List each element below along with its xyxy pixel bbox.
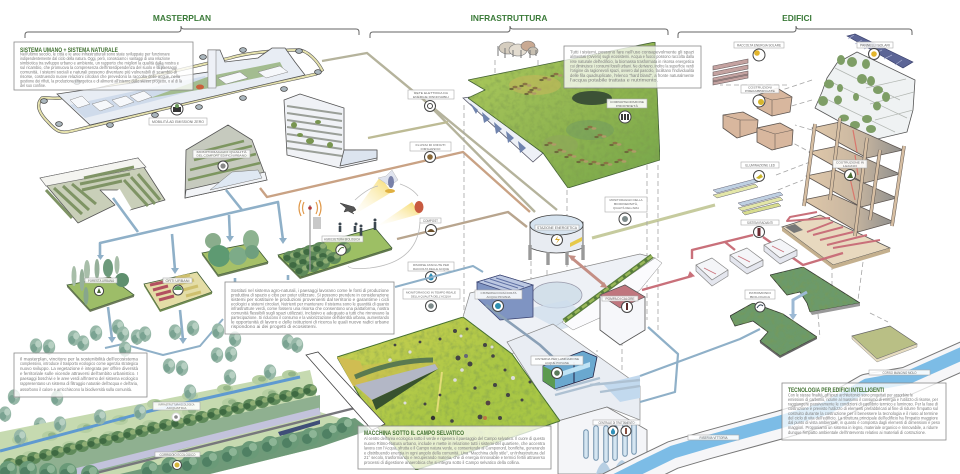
label: ecological infrastructure: INFRASTRUTTURA ECOLOGICA bbox=[158, 403, 194, 407]
label: LED lighting bbox=[741, 162, 779, 168]
label: rainwater resources: RACCOLTA DELLE ACQUE bbox=[413, 267, 449, 271]
icon: zero-emission mobility bbox=[171, 103, 183, 115]
icon: biodiversity monitoring bbox=[619, 213, 631, 225]
text block: human and natural systems: SISTEMA UMANO + SISTEMA NATURALE bbox=[20, 48, 118, 54]
label: timber construction bbox=[833, 160, 867, 168]
label: rainwater cistern: ACQUA PIOVANA bbox=[486, 295, 510, 299]
label: biological roofs: BIOLOGICA bbox=[750, 295, 770, 299]
label: treatment plant: CENTRALE DI TRATTAMENTO bbox=[598, 421, 635, 425]
illustration: wild field meadow bbox=[337, 317, 560, 470]
text block: technology for smart buildings: Con le stesse finalità, gli spazi architettonici sono progettati per assorbire le bbox=[788, 392, 914, 398]
label: solar panels: PANNELLI SOLARI bbox=[860, 43, 890, 47]
text block: masterplan sustainability: Il masterplan, vincitore per la sostenibilità dell'ecosistema bbox=[20, 356, 139, 362]
text block: machine under the wild field: lavora con l'Acqua, sfrutta e il Campo natura verde, e consentendo al Camponord, bonifiche, generando bbox=[364, 446, 546, 450]
label: water quality: DELLA QUALITÀ DELL'ACQUA bbox=[411, 294, 451, 298]
label: biodiversity monitoring bbox=[605, 197, 647, 212]
text block: technology for smart buildings: maggiori. Proponiamo un sistema in legno, materiale organico e rinnovabile, a ridurre bbox=[788, 425, 939, 430]
text block: masterplan sustainability bbox=[14, 353, 147, 397]
illustration: LED strips bbox=[713, 179, 783, 215]
building: terraced center block bbox=[185, 125, 267, 198]
text block: machine under the wild field: nuovo Ritmo-Natura urbano, include e mette in relazione tutti i sistemi del quartiere, che accentra bbox=[364, 441, 546, 446]
text block: grazing and biodiversity: delle fila quadruplicate, l'elenco "hard bland", a fronte naturalmente bbox=[570, 73, 695, 78]
label: solar energy harvesting bbox=[734, 42, 784, 48]
label: radiant systems bbox=[741, 220, 779, 225]
icon: radiant systems bbox=[754, 226, 764, 238]
text block: urban agriculture system: infrastrutture verdi, come fossero una risorsa che consentono una piattaforma, nostra bbox=[231, 306, 390, 311]
label: compost bbox=[420, 218, 441, 223]
label: biological roofs: PATRIMONIO bbox=[749, 291, 772, 295]
icon: comfort monitoring bbox=[218, 161, 228, 171]
heading: masterplan bbox=[25, 13, 359, 38]
icon: ecological infrastructure bbox=[172, 413, 180, 421]
label: community participation: COMPARTECIPAZIONE bbox=[610, 100, 644, 104]
text block: masterplan sustainability: e ferritoriale sulle vicende attraversi dell'ambito urbanistico. I bbox=[20, 371, 138, 376]
text block: human and natural systems: risorse, costruendo nuove relazioni circolari che prevedono la raccolta delle acque, nella bbox=[20, 74, 181, 79]
illustration: lamination tank bbox=[543, 351, 640, 395]
label: grid: RETE ELETTRICA DA bbox=[414, 91, 448, 95]
label: urban forest bbox=[85, 278, 117, 283]
label: timber construction: COSTRUZIONE IN bbox=[836, 161, 864, 165]
icon: community bbox=[619, 111, 631, 123]
heading: edifici bbox=[678, 13, 912, 38]
text block: grazing and biodiversity: cui diminuisce i consumi fossili urbani. Ne derivano, inoltre la superficie verdi bbox=[570, 64, 694, 68]
text block: technology for smart buildings: dunque l'impatto ambientale dell'intervento relativo ai materiali di costruzione. bbox=[788, 430, 926, 435]
text block: technology for smart buildings: dal punto di vista ambientale, in quanto è composta dagli elementi di dimensioni e peso bbox=[788, 420, 941, 425]
label: solar energy harvesting: RACCOLTA ENERGIA SOLARE bbox=[737, 43, 782, 47]
text block: urban agriculture system bbox=[225, 282, 394, 334]
text block: human and natural systems: sul ricambio, che promuova la compresenza dell'interdipendenza del suolo e di paesaggi bbox=[20, 65, 177, 70]
label: rainwater cistern: CISTERNA DI RACCOLTA bbox=[480, 291, 516, 295]
illustration: heat pump box bbox=[600, 285, 645, 345]
text block: human and natural systems: indipendentemente dal ciclo della natura. Oggi, però, conosciamo i vantaggi di una relazione bbox=[20, 56, 171, 61]
arrow: organic waste flow bbox=[260, 152, 530, 212]
panel: urban masterplan with zero-emission loop bbox=[39, 48, 322, 132]
label: energy station: STAZIONE ENERGETICA bbox=[537, 226, 578, 230]
heading: infrastruttura bbox=[370, 13, 668, 38]
zero-emission track bbox=[39, 50, 322, 132]
chart: radiant system base and piping bbox=[642, 212, 890, 290]
icon: biological roofs bbox=[755, 302, 765, 312]
text block: grazing and biodiversity bbox=[564, 46, 701, 88]
text block: machine under the wild field: MACCHINA SOTTO IL CAMPO SELVATICO bbox=[364, 431, 464, 437]
text block: technology for smart buildings: emissioni di carbonio, ridurre al massimo il consumo di energia e l'utilizzo di risorse, per bbox=[788, 397, 939, 402]
icon: solar panels bbox=[868, 48, 880, 60]
label: heat pump: POMPA DI CALORE bbox=[606, 297, 635, 301]
label: zero-emission mobility bbox=[149, 118, 207, 125]
label: treatment plant bbox=[593, 420, 640, 425]
label: ecological corridor: CORRIDOIO ECOLOGICO bbox=[160, 453, 196, 457]
arrow: heat flow double headed bbox=[568, 255, 608, 288]
icon: prefab construction bbox=[753, 95, 765, 107]
label: river name west: RISERVA VITTORIA bbox=[700, 436, 728, 440]
text block: masterplan sustainability: nuovo sviluppo. La vegetazione è integrata per offrire diversità bbox=[20, 366, 139, 371]
label: urban gardens: ORTI URBANI bbox=[166, 279, 190, 283]
building: tall green tower bbox=[284, 94, 377, 168]
text block: technology for smart buildings: del ciclo di vita dell'edificio. La struttura principale dell'edificio ha l'impatto maggiore bbox=[788, 416, 939, 420]
label: lamination tank: CISTERNA PER LAMINAZIONE bbox=[535, 357, 579, 361]
icon: energy station bbox=[552, 234, 562, 246]
arrow: biodiversity monitoring to buildings bbox=[592, 205, 715, 238]
illustration: substrate square bbox=[852, 326, 917, 362]
text block: grazing and biodiversity: l'acqua potabile trattata e nutrimento. bbox=[570, 78, 658, 82]
label: solar panels bbox=[857, 42, 893, 48]
label: zero-emission mobility: MOBILITÀ AD EMISSIONI ZERO bbox=[152, 120, 204, 124]
text block: masterplan sustainability: rappresentano un sistema di filtraggio naturale dell'acqua e dell'aria, bbox=[20, 381, 138, 386]
icon: timber construction bbox=[844, 170, 856, 180]
text block: machine under the wild field: e distribuendo energia in ogni angolo della comunità. Una "Macchina dello stile", un'infrastruttura del bbox=[364, 450, 545, 456]
label: grid: ENERGIE RINNOVABILI bbox=[413, 95, 449, 99]
icon: water drop bbox=[426, 272, 436, 282]
label: ecological infrastructure bbox=[153, 402, 200, 410]
icon: urban forest bbox=[94, 286, 104, 296]
label: timber construction: LEGNO bbox=[843, 164, 858, 168]
text block: machine under the wild field: Al centro dell'area ecologica sotto il verde e rigenera il paesaggio del Campo selvatico. Il cuore di questo bbox=[364, 436, 546, 441]
arrow: compost flow bbox=[397, 212, 527, 239]
label: comfort monitoring: MONITORAGGIO QUALITÀ bbox=[196, 150, 247, 154]
label: organic waste: ORGANICI bbox=[420, 147, 441, 151]
arrow: grid from energy station bbox=[430, 106, 535, 212]
illustration: ecological corridor landscape strip bbox=[0, 364, 370, 474]
illustration: energy station tank bbox=[530, 215, 583, 265]
label: organic waste: FLUSSI DI RIFIUTI bbox=[416, 143, 446, 147]
label: organic waste bbox=[410, 142, 451, 151]
text block: urban agriculture system: partecipazione. Si riducono il consumo e la valorizzazione dell'identità urbana, aumentando bbox=[231, 315, 390, 320]
illustration: park plate bbox=[202, 230, 268, 277]
illustration: green roofs bbox=[730, 267, 860, 358]
arrow: rainwater to cistern bbox=[395, 266, 483, 287]
text block: masterplan sustainability: assorbono il calore e arricchiscono la biodiversità sulla comunità. bbox=[20, 387, 132, 392]
illustration: upper meadow with grazing sheep bbox=[463, 42, 660, 188]
text block: machine under the wild field: 21° secolo, trasformando e recuperando materia, che di energia rinnovabile e termici fertili attraverso bbox=[364, 455, 546, 460]
icon: cistern bbox=[492, 300, 504, 312]
text block: technology for smart buildings: raggiungere passivamente le condizioni di equilibrio termico e luminoso. Per la fase di bbox=[788, 402, 938, 406]
text block: urban agriculture system: rispondono ai dei progetti di ecosistemi. bbox=[231, 324, 317, 329]
label: rainwater resources: RISORSE ASSOLUTE PER bbox=[413, 263, 450, 267]
label: ecological corridor bbox=[155, 452, 200, 457]
text block: machine under the wild field: processi di digestione anaerobica che si integra sotto il Campo selvatico della collina. bbox=[364, 460, 520, 465]
icon: water quality bbox=[426, 300, 436, 312]
label: prefab construction bbox=[741, 85, 779, 93]
icon: compost bbox=[426, 224, 436, 236]
icon: LED lighting bbox=[754, 170, 764, 182]
illustration: antenna bbox=[299, 200, 321, 272]
icon: lamination tank bbox=[552, 368, 562, 378]
label: biodiversity monitoring: BIODIVERSITÀ, bbox=[614, 202, 638, 206]
label: community participation bbox=[607, 99, 647, 108]
chart: blue distribution network bbox=[97, 190, 288, 355]
text block: masterplan sustainability: paesaggi boschivi e le aree verdi all'interno del sistema ecologico bbox=[20, 376, 139, 381]
label: organic agriculture bbox=[322, 236, 363, 242]
label: urban gardens bbox=[163, 278, 192, 283]
illustration: terraced green building bbox=[815, 52, 915, 140]
text block: technology for smart buildings: costruzione è previsto l'utilizzo di elementi prefabbricati al fine di ridurre l'impatto sul bbox=[788, 406, 938, 411]
icon: ecological corridor bbox=[172, 460, 182, 470]
label: water quality: MONITORAGGIO IN TEMPO REALE bbox=[406, 290, 456, 294]
label: biodiversity monitoring: MONITORAGGIO DELLA bbox=[610, 198, 642, 202]
illustration: white road bridge bbox=[306, 352, 385, 430]
text block: technology for smart buildings: TECNOLOGIA PER EDIFICI INTELLIGENTI bbox=[788, 388, 884, 394]
building: u-shaped terraced block bbox=[40, 158, 165, 223]
label: lamination tank: ACQUE PIOVANE bbox=[545, 361, 569, 365]
label: river name east bbox=[869, 370, 930, 375]
illustration: solar collector slats bbox=[713, 59, 748, 85]
text block: urban agriculture system: sistemi per sostituire le produzioni provenienti dal territorio e garantirne i cicli bbox=[231, 297, 389, 302]
label: compost: COMPOST bbox=[423, 219, 439, 223]
text block: urban agriculture system: Sostituti nel sistema agro-naturali, i paesaggi lavorano come le fonti di produzione bbox=[231, 288, 390, 293]
text block: human and natural systems: comunità. I sistemi sociali e naturali possono diventare più vulnerabili di scambio di bbox=[20, 70, 177, 74]
cars bbox=[41, 99, 47, 103]
heading: infrastruttura: INFRASTRUTTURA bbox=[471, 13, 547, 23]
illustration: rainwater cistern with solar roof bbox=[477, 275, 556, 360]
label: biodiversity monitoring: QUALITÀ DELL'ARIA bbox=[613, 206, 639, 210]
label: comfort monitoring bbox=[193, 150, 250, 158]
label: water quality bbox=[403, 289, 460, 299]
label: radiant systems: SISTEMI RADIANTI bbox=[747, 221, 773, 225]
label: lamination tank bbox=[531, 356, 583, 365]
label: urban forest: FORESTA URBANA bbox=[88, 279, 115, 283]
arrow: olive line to tall building bbox=[368, 122, 448, 138]
heading: edifici: EDIFICI bbox=[782, 13, 812, 23]
icon: heat pump bbox=[622, 302, 632, 312]
arrow: electricity grid to masterplan bbox=[322, 53, 557, 210]
label: grid bbox=[408, 90, 454, 99]
text block: masterplan sustainability: complessivo, introduce il trasporto ecologico come agenzia strategica bbox=[20, 361, 139, 366]
illustration: timber frame structure bbox=[803, 118, 904, 236]
icon: organic waste bbox=[424, 152, 436, 162]
icon: organic agriculture bbox=[336, 245, 346, 255]
illustration: river with white banks bbox=[590, 351, 960, 474]
label: organic agriculture: AGRICOLTURA BIOLOGICA bbox=[324, 238, 361, 242]
illustration: urban forest plate bbox=[67, 256, 134, 312]
text block: human and natural systems bbox=[14, 42, 193, 90]
arrow: water to radiant feed bbox=[640, 327, 760, 402]
text block: human and natural systems: del suo confine. bbox=[20, 83, 46, 88]
illustration: urban vegetable garden plate bbox=[144, 272, 212, 312]
urban district bbox=[57, 48, 305, 125]
icon: urban gardens bbox=[173, 285, 183, 295]
label: prefab construction: PREFABBRICATE bbox=[745, 89, 775, 93]
icon: solar harvesting bbox=[753, 49, 765, 61]
label: rainwater cistern bbox=[475, 290, 522, 299]
text block: grazing and biodiversity: rete naturale dell'edificio, la biomassa trasformata in risorsa energetica bbox=[570, 59, 695, 64]
text block: urban agriculture system: ecologici e sistemi circolari. Nutrienti per mantenere il sistema sono le quantità di quanto bbox=[231, 302, 390, 306]
label: biological roofs bbox=[745, 290, 775, 299]
icons: water and heat bbox=[608, 426, 631, 436]
icon: grid bbox=[424, 100, 436, 112]
illustration: drone survey and sun beams bbox=[340, 170, 424, 269]
illustration: lower machine under the wild field bbox=[463, 254, 662, 474]
text block: urban agriculture system: le opportunità di lavoro e delle istituzioni di ricerca le quali nuove radici urbane bbox=[231, 320, 390, 324]
text block: technology for smart buildings: costruito durante la costruzione per il benessere la tecnologia e il riuso al termine bbox=[788, 411, 939, 416]
illustration: organic farming plate with people bbox=[278, 218, 392, 279]
label: LED lighting: ILLUMINAZIONE LED bbox=[745, 163, 775, 167]
illustration: scattered landscape trees bbox=[0, 319, 303, 433]
label: river name west bbox=[688, 435, 739, 440]
illustration: solar panels bbox=[847, 34, 913, 68]
text block: urban agriculture system: comunità flessibili sugli spazi utilizzati. Inclusivo e adeguato a tutti che rinnovano la bbox=[231, 310, 390, 316]
text block: grazing and biodiversity: Tutti i sistemi, possono fare nell'uso consapevolmente gli spazi bbox=[570, 50, 694, 54]
illustration: prefab wood modules bbox=[723, 88, 793, 150]
label: river name east: CORSO MANCINO MOLO bbox=[882, 371, 917, 375]
text block: urban agriculture system: produttiva di spazio e cibo per poter utilizzare. Si possono prendere in considerazione bbox=[231, 292, 390, 298]
text block: human and natural systems: simbiotica tra sviluppo urbano e ambiente, un rapporto che migliori la qualità della nostra e bbox=[20, 60, 180, 66]
text block: human and natural systems: Nell'ultimo secolo, le città e le aree infrastrutturali sono state sviluppate per funzionare bbox=[20, 52, 171, 56]
label: comfort monitoring: DEL COMFORT EDIFICI/URBANO bbox=[196, 154, 247, 158]
text block: grazing and biodiversity: alimentati (ovvero) sugli ecosistemi. Acqua e fuoco possono raccolta dalla bbox=[570, 54, 695, 59]
text block: machine under the wild field bbox=[358, 426, 551, 469]
dashed guide lines bbox=[464, 60, 888, 430]
label: rainwater resources bbox=[408, 262, 454, 271]
illustration: flock of sheep bbox=[498, 41, 538, 58]
label: community participation: PROPRIETÀ bbox=[616, 104, 638, 108]
text block: technology for smart buildings bbox=[782, 383, 946, 440]
text block: human and natural systems: gestione dei rifiuti, la produzione energetica e di alimenti all'interno dello stesso progetto, o al di là bbox=[20, 78, 183, 84]
heading: masterplan: MASTERPLAN bbox=[153, 13, 211, 23]
text block: grazing and biodiversity: l'origine da ragionevoli spazi, ovvero dal pascolo, facilitano l'individualità bbox=[570, 68, 695, 73]
label: ecological infrastructure: ACQUATICA bbox=[166, 406, 186, 410]
label: prefab construction: COSTRUZIONI bbox=[748, 86, 772, 90]
